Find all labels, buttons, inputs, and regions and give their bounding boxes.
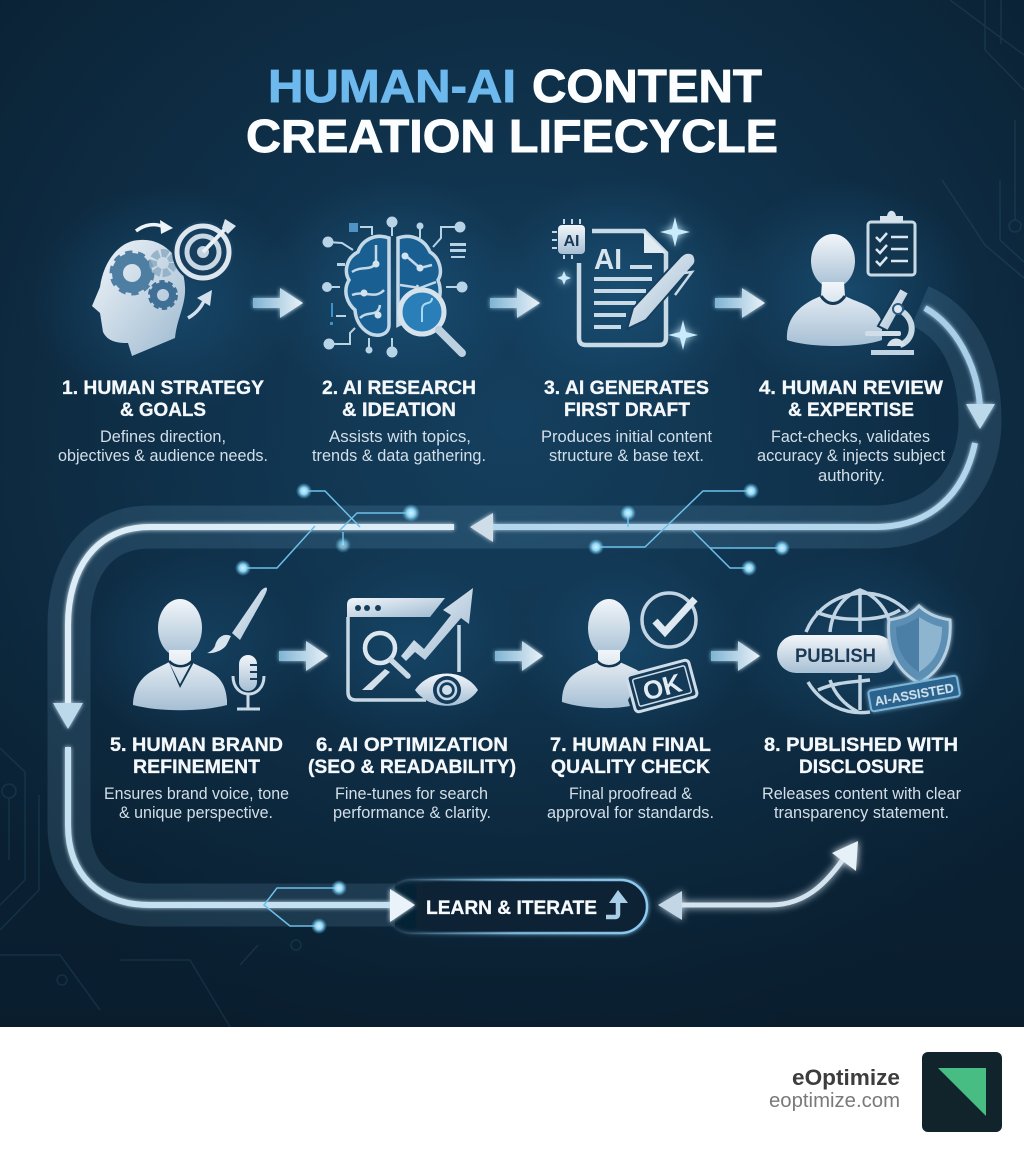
icon: globe with publish button, shield and badge: PUBLISH	[795, 646, 876, 667]
description	[762, 784, 961, 822]
title: CREATION LIFECYCLE	[246, 110, 778, 162]
icon: head with gears and target	[92, 219, 236, 356]
description: authority.	[818, 466, 885, 485]
description: Releases content with clear	[762, 784, 961, 803]
description: Fine-tunes for search	[335, 784, 488, 803]
heading: & GOALS	[120, 400, 206, 421]
right curve with down arrow	[470, 308, 995, 542]
description: & unique perspective.	[119, 803, 273, 822]
title	[246, 60, 778, 162]
description	[333, 784, 491, 822]
description: Ensures brand voice, tone	[104, 784, 289, 803]
logo	[922, 1052, 1002, 1132]
heading	[550, 735, 711, 778]
icon: AI document with pen: AI	[594, 244, 622, 276]
step 6	[308, 588, 516, 822]
heading: 7. HUMAN FINAL	[550, 735, 711, 756]
heading	[764, 735, 958, 778]
step 2	[312, 216, 486, 465]
arrow 5 to 6	[279, 641, 328, 671]
description	[757, 427, 945, 485]
description	[104, 784, 289, 822]
description	[312, 427, 486, 465]
heading	[308, 735, 516, 778]
icon: up arrow	[606, 890, 628, 917]
description: Assists with topics,	[329, 427, 471, 446]
icon: AI document with pen	[552, 217, 698, 350]
step 4	[757, 211, 945, 485]
description: performance & clarity.	[333, 803, 491, 822]
step 1	[58, 219, 268, 465]
heading: FIRST DRAFT	[564, 400, 690, 421]
heading: 1. HUMAN STRATEGY	[62, 378, 264, 399]
arrow 2 to 3	[490, 288, 540, 318]
heading: 6. AI OPTIMIZATION	[316, 735, 508, 756]
description: Produces initial content	[541, 427, 712, 446]
brand name: eOptimize	[792, 1065, 900, 1090]
icon: person with brush and microphone	[133, 588, 267, 710]
heading	[322, 378, 476, 421]
step 5	[104, 588, 289, 822]
arrow 7 to 8	[711, 641, 760, 671]
heading: & EXPERTISE	[788, 400, 914, 421]
title: HUMAN-AI	[268, 60, 516, 112]
return arrow to publish	[658, 841, 858, 920]
heading: & IDEATION	[342, 400, 456, 421]
icon: person with check circle and OK stamp	[562, 593, 698, 713]
brand url: eoptimize.com	[769, 1090, 900, 1112]
lifecycle flow path	[53, 306, 995, 934]
description: Fact-checks, validates	[771, 427, 930, 446]
heading	[759, 378, 943, 421]
description: approval for standards.	[547, 803, 714, 822]
icon: person with clipboard and microscope	[787, 211, 915, 355]
heading: 3. AI GENERATES	[544, 378, 709, 399]
description: Defines direction,	[100, 427, 226, 446]
icon: globe with publish button, shield and badge	[777, 590, 960, 713]
description	[547, 784, 714, 822]
heading: 8. PUBLISHED WITH	[764, 735, 958, 756]
arrow 1 to 2	[253, 288, 303, 318]
step 3	[541, 217, 712, 465]
description: accuracy & injects subject	[757, 446, 945, 465]
arrow 6 to 7	[495, 641, 543, 671]
description: structure & base text.	[549, 446, 704, 465]
icon: globe with publish button, shield and badge: AI-ASSISTED	[874, 680, 955, 709]
description: Final proofread &	[569, 784, 693, 803]
footer	[0, 1027, 1024, 1154]
left curve with down arrow	[53, 527, 454, 922]
learn and iterate pill: LEARN & ITERATE	[426, 898, 597, 919]
heading: QUALITY CHECK	[551, 757, 710, 778]
learn and iterate pill	[385, 880, 647, 933]
description	[541, 427, 712, 465]
heading: 4. HUMAN REVIEW	[759, 378, 943, 399]
path band	[69, 306, 980, 905]
heading: (SEO & READABILITY)	[308, 757, 516, 778]
icon: brain with magnifier and circuit nodes	[322, 216, 468, 358]
heading: DISCLOSURE	[799, 757, 924, 778]
heading	[544, 378, 709, 421]
title: CONTENT	[532, 60, 762, 112]
heading: REFINEMENT	[133, 757, 260, 778]
step 8	[762, 590, 961, 822]
heading: 2. AI RESEARCH	[322, 378, 476, 399]
icon: AI document with pen: AI	[564, 233, 580, 250]
icon: person with check circle and OK stamp: OK	[640, 667, 685, 707]
icon: browser with magnifier, growth arrow and eye	[347, 588, 478, 706]
heading: 5. HUMAN BRAND	[110, 735, 283, 756]
heading	[62, 378, 264, 421]
step 7	[547, 593, 714, 822]
heading	[110, 735, 283, 778]
arrow 3 to 4	[715, 288, 765, 318]
circuit branches	[243, 491, 782, 926]
description	[58, 427, 268, 465]
description: objectives & audience needs.	[58, 446, 268, 465]
description: transparency statement.	[774, 803, 949, 822]
description: trends & data gathering.	[312, 446, 486, 465]
